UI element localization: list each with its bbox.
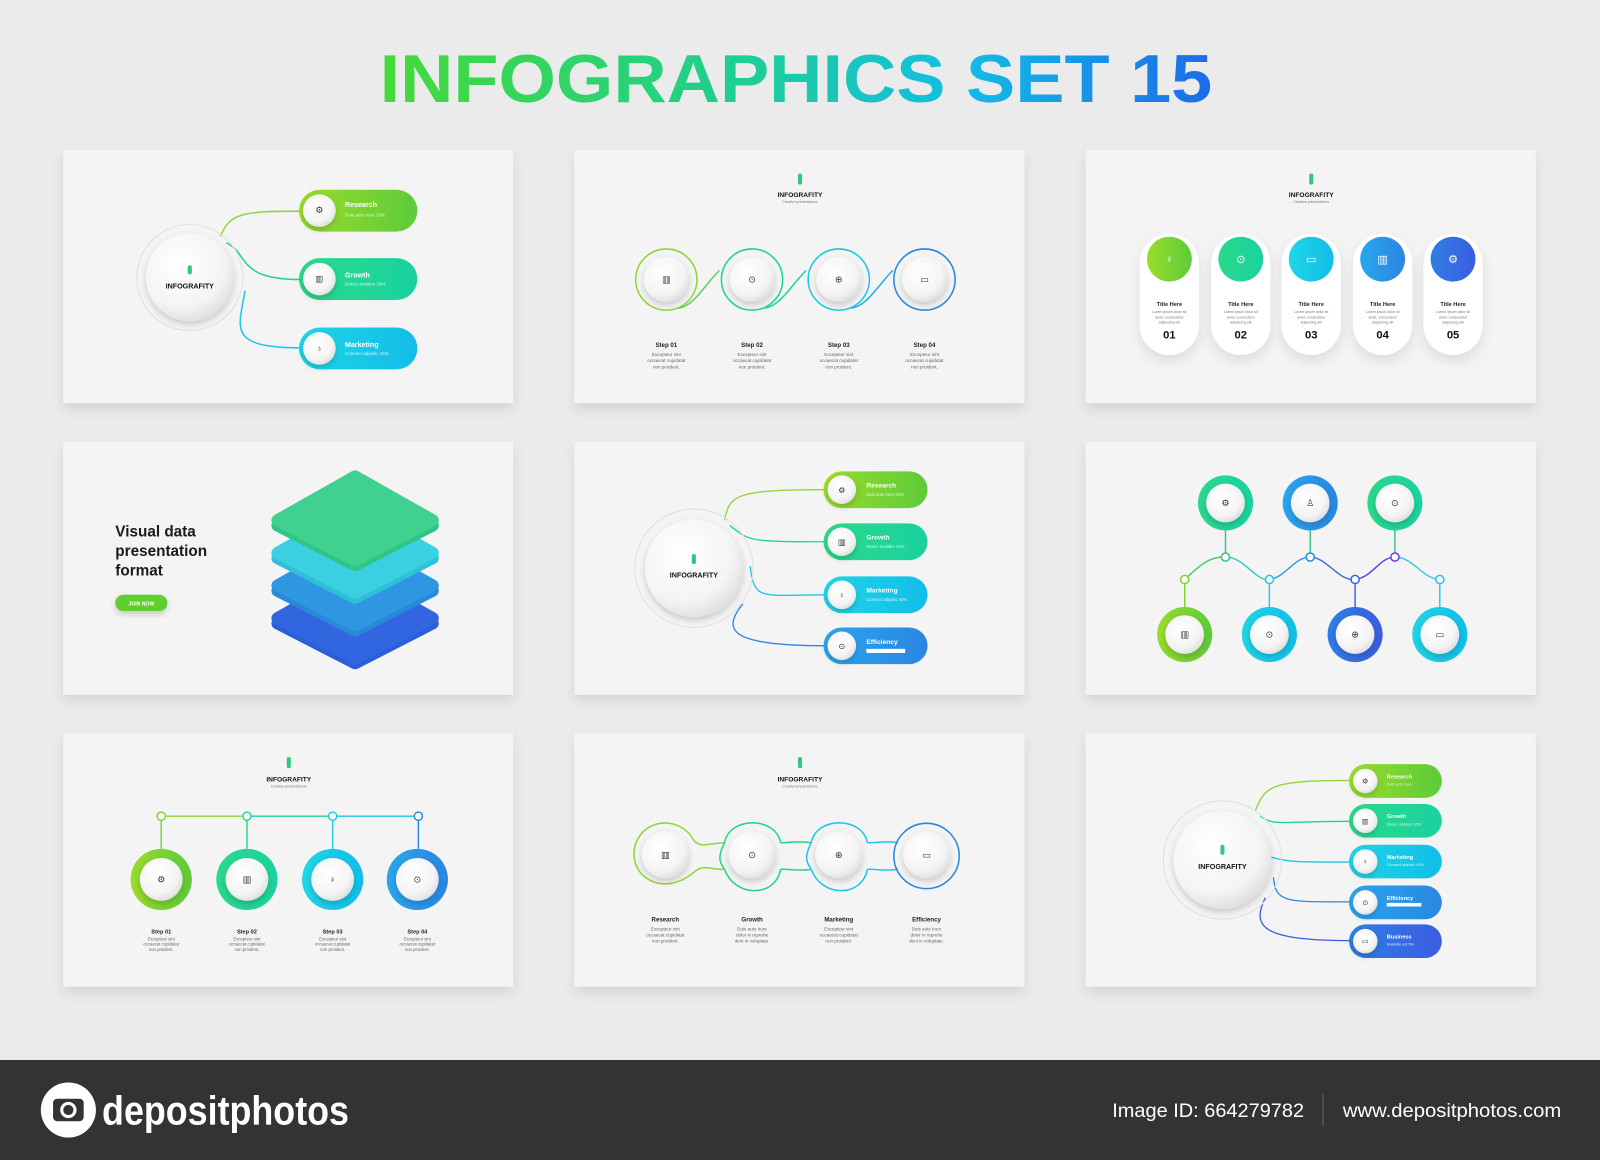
heading text — [115, 524, 207, 579]
pills: Growth — [866, 535, 890, 542]
cards: adipiscing elit — [1230, 320, 1252, 324]
cards: ▭ — [1306, 254, 1317, 266]
cards: Title Here — [1370, 302, 1395, 308]
connector lines — [220, 211, 301, 348]
cards: adipiscing elit — [1442, 320, 1464, 324]
logo: Creative presentations — [271, 785, 307, 789]
pills: ⚙ — [838, 486, 845, 495]
step labels: occaecat cupidatat — [315, 942, 351, 947]
logo: INFOGRAFITY — [778, 776, 823, 783]
circles: ♙ — [1306, 498, 1314, 508]
logo: Creative presentations — [782, 200, 818, 204]
step labels: occaecat cupidatat — [229, 942, 266, 947]
footer id: Image ID: 664279782 — [1112, 1100, 1304, 1122]
linked rings — [634, 823, 959, 891]
pill: Research — [299, 190, 417, 232]
cards: Lorem ipsum dolor sit — [1224, 310, 1258, 314]
pill: Growth: ▥ — [316, 275, 323, 284]
step labels: Step 04 — [407, 930, 428, 936]
cards: ⊙ — [1236, 254, 1246, 266]
cards — [1140, 234, 1483, 355]
cards: ♀ — [1165, 254, 1174, 266]
step labels: Excepteur sint — [148, 937, 176, 942]
panel: four steps with arrows — [574, 150, 1024, 403]
step labels: Excepteur sint — [910, 352, 940, 357]
step circles — [131, 849, 448, 910]
labels: occaecat cupidatat — [646, 933, 685, 938]
pills: Business — [1387, 935, 1412, 941]
pill: Growth: Donec sodales 16% — [345, 282, 386, 287]
labels: Duis aute irure — [737, 926, 767, 931]
pills: ⚙ — [1362, 778, 1369, 786]
wave line — [1185, 529, 1440, 609]
step labels: non proident. — [149, 947, 174, 952]
pills: Connect adipisic 48% — [1387, 862, 1424, 867]
step circles: ♀ — [329, 874, 336, 884]
cards: adipiscing elit — [1372, 320, 1393, 324]
logo: Creative presentations — [1293, 200, 1329, 204]
labels: Research — [652, 916, 679, 923]
cards: adipiscing elit — [1301, 320, 1322, 324]
labels: Efficiency — [912, 916, 942, 923]
step labels: Step 03 — [323, 930, 343, 936]
pill: Growth — [299, 258, 417, 300]
wave nodes — [1181, 553, 1444, 584]
button: JOIN NOW — [128, 602, 154, 608]
panel: layers — [63, 442, 513, 695]
logo: Creative presentations — [782, 785, 818, 789]
heading text: Visual data — [115, 524, 196, 541]
pills: Connect adipisic 48% — [866, 597, 908, 602]
pills: Growth — [1387, 814, 1407, 820]
pills: ▭ — [1362, 938, 1369, 946]
central ball — [635, 509, 753, 627]
step circles: ▥ — [243, 874, 251, 884]
cards: Lorem ipsum dolor sit — [1366, 310, 1400, 314]
pill: Marketing: Connect adipisic 48% — [345, 351, 389, 356]
pills: ⊙ — [1362, 899, 1368, 907]
pill: Research: Research — [345, 201, 377, 209]
connector lines — [724, 490, 827, 646]
panel: four steps with arrows: ▥ — [662, 275, 671, 285]
logo — [778, 173, 823, 204]
labels: non proident. — [652, 939, 679, 944]
pill: Marketing: Marketing — [345, 341, 379, 349]
pills: Molestie est 5% — [1387, 942, 1415, 947]
heading text: format — [115, 562, 163, 579]
panel: linked circles — [574, 734, 1024, 987]
pills: Marketing — [1387, 855, 1414, 861]
step labels: non proident. — [234, 947, 259, 952]
step labels: non proident. — [405, 947, 430, 952]
cards: 03 — [1305, 330, 1317, 342]
circles: ▭ — [1435, 630, 1444, 640]
step labels: Excepteur sint — [738, 352, 767, 357]
cards: amet, consectetur — [1368, 315, 1398, 319]
cards: Lorem ipsum dolor sit — [1152, 310, 1186, 314]
cards: 04 — [1376, 330, 1390, 342]
central ball: INFOGRAFITY — [670, 571, 718, 579]
heading text: presentation — [115, 543, 207, 560]
step labels: occaecat cupidatat — [733, 358, 772, 363]
step labels: non proident. — [739, 364, 765, 369]
panel: four steps with arrows: ▭ — [920, 275, 929, 285]
circles — [1157, 475, 1467, 662]
labels: dent in voluptate. — [909, 939, 944, 944]
labels: occaecat cupidatat — [820, 933, 859, 938]
pill: Research: Duis aute irure 32% — [345, 212, 385, 217]
panel: four steps with arrows: ⊙ — [748, 275, 756, 285]
panel: four steps timeline — [63, 734, 513, 987]
logo: INFOGRAFITY — [1289, 192, 1334, 199]
labels: dolor in reprehe — [910, 933, 943, 938]
step labels — [647, 342, 944, 369]
cards: Title Here — [1298, 302, 1324, 308]
title: INFOGRAPHICS SET 15 — [380, 42, 1212, 117]
step labels: occaecat cupidatat — [400, 942, 436, 947]
circles: ⊕ — [1351, 630, 1359, 640]
central ball — [137, 224, 243, 331]
step circles — [636, 249, 955, 310]
labels: dolor in reprehe — [736, 933, 769, 938]
logo — [778, 757, 823, 789]
footer logo — [41, 1082, 349, 1138]
panel: linked circles: ▭ — [922, 850, 931, 860]
pill: Research: ⚙ — [315, 205, 324, 215]
pills: ▥ — [1362, 817, 1369, 825]
step labels: occaecat cupidatat — [820, 358, 859, 363]
panel: four steps with arrows: ⊕ — [835, 275, 843, 285]
circles: ▥ — [1180, 630, 1189, 640]
logo: INFOGRAFITY — [778, 192, 823, 199]
panel: linked circles: ⊙ — [748, 850, 756, 860]
step circles: ⚙ — [157, 874, 165, 884]
pills: Efficiency — [866, 639, 898, 646]
cards: adipiscing elit — [1159, 320, 1180, 324]
step labels: non proident. — [825, 364, 852, 369]
cards: amet, consectetur — [1155, 315, 1184, 319]
panel: wave with seven circles — [1086, 442, 1536, 695]
step labels: Excepteur sint — [652, 352, 682, 357]
cards: amet, consectetur — [1297, 315, 1326, 319]
step labels: non proident. — [911, 364, 938, 369]
pills — [1349, 764, 1442, 958]
step labels: occaecat cupidatat — [143, 942, 180, 947]
labels: dent in voluptate. — [735, 939, 769, 944]
labels: Marketing — [824, 916, 853, 923]
step labels: non proident. — [653, 364, 680, 369]
cards: amet, consectetur — [1227, 315, 1256, 319]
pill: Growth: Growth — [345, 272, 370, 280]
pills: Duis aute irure 32% — [866, 492, 904, 497]
panel: central circle with five pills — [1086, 734, 1536, 987]
central ball: INFOGRAFITY — [166, 283, 214, 291]
step labels: Step 04 — [914, 342, 936, 349]
panel: linked circles: ▥ — [661, 850, 670, 860]
step circles: ⊙ — [414, 874, 421, 884]
footer logo: depositphotos — [102, 1087, 349, 1133]
cards: Title Here — [1440, 302, 1466, 308]
pills: Research — [1387, 774, 1413, 780]
panel: central circle with four pills — [574, 442, 1024, 695]
logo — [266, 757, 312, 789]
footer url: www.depositphotos.com — [1342, 1100, 1561, 1122]
step labels: Step 01 — [655, 342, 678, 349]
panel: central circle with three pills — [63, 150, 513, 403]
circles: ⚙ — [1221, 498, 1230, 508]
pills: Donec sodales 16% — [866, 544, 904, 549]
pills: Donec sodales 16% — [1387, 821, 1422, 826]
footer bar — [0, 1060, 1600, 1160]
pills: ♀ — [839, 591, 845, 600]
pills: ▥ — [838, 538, 846, 547]
cards: Title Here — [1157, 302, 1182, 308]
step labels: Step 02 — [741, 342, 764, 349]
button — [115, 595, 167, 611]
cards: ⚙ — [1448, 254, 1458, 266]
cards: 02 — [1235, 330, 1247, 342]
step labels: Excepteur sint — [233, 937, 261, 942]
pills: Marketing — [866, 588, 898, 595]
layer stack — [278, 476, 433, 663]
step labels: Step 01 — [151, 930, 171, 936]
pills: ♀ — [1363, 858, 1368, 866]
labels: Growth — [741, 916, 763, 923]
step labels: non proident. — [320, 947, 345, 952]
step labels: Excepteur sint — [404, 937, 432, 942]
logo — [1289, 173, 1334, 204]
timeline — [157, 812, 422, 849]
step labels: occaecat cupidatat — [905, 358, 944, 363]
panel: five vertical cards — [1086, 150, 1536, 403]
circles: ⊙ — [1266, 630, 1273, 640]
pills — [823, 471, 928, 664]
cards: amet, consectetur — [1439, 315, 1468, 319]
central ball: INFOGRAFITY — [1198, 863, 1247, 871]
pills: Efficiency — [1387, 896, 1414, 902]
labels: Excepteur sint — [824, 926, 854, 931]
cards: Lorem ipsum dolor sit — [1436, 310, 1470, 314]
logo: INFOGRAFITY — [266, 776, 312, 783]
cards: Lorem ipsum dolor sit — [1294, 310, 1328, 314]
cards: 01 — [1163, 330, 1176, 342]
labels: non proident. — [825, 939, 852, 944]
cards: Title Here — [1228, 302, 1254, 308]
labels: Excepteur sint — [651, 926, 681, 931]
step labels: Excepteur sint — [824, 352, 854, 357]
pills: Duis aute irure — [1387, 782, 1412, 787]
labels: Duis aute irure — [912, 926, 942, 931]
step labels: Step 02 — [237, 930, 257, 936]
connector lines — [1255, 780, 1352, 941]
central ball — [1163, 801, 1282, 919]
labels — [646, 916, 944, 944]
pill: Marketing: ♁ — [316, 344, 322, 353]
panel: linked circles: ⊕ — [835, 850, 843, 860]
cards: ▥ — [1377, 254, 1388, 266]
cards: 05 — [1447, 330, 1459, 342]
step labels: occaecat cupidatat — [647, 358, 686, 363]
step labels: Step 03 — [828, 342, 850, 349]
pills: ⊙ — [838, 642, 845, 651]
step labels: Excepteur sint — [319, 937, 347, 942]
circles: ⊙ — [1391, 498, 1399, 508]
pill: Marketing — [299, 327, 417, 369]
step labels — [143, 930, 436, 952]
pills: Research — [866, 483, 896, 490]
